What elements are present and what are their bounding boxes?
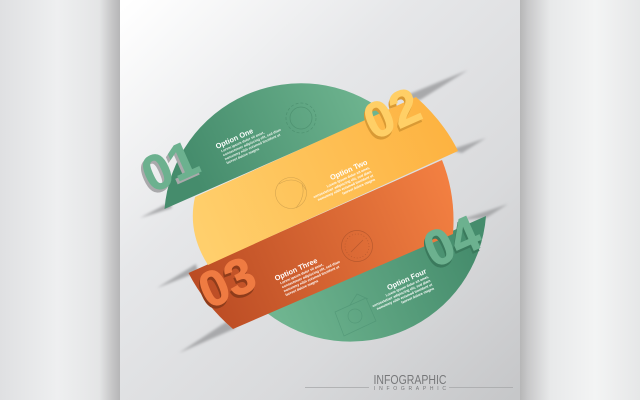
text: option two: Option Two bbox=[329, 157, 369, 182]
title: INFOGRAPHIC bbox=[374, 386, 446, 392]
icon: camera bbox=[335, 294, 376, 336]
title bbox=[374, 373, 446, 392]
text: option three: Lorem ipsum dolor sit amet, bbox=[280, 263, 324, 285]
text: option three: Option Three bbox=[273, 256, 319, 283]
text: option two: consectetuer adipiscing elit, sed diam bbox=[313, 170, 372, 199]
panel: option three orange band bbox=[188, 160, 454, 329]
slit shadows bbox=[140, 70, 508, 353]
text: option four: consectetuer adipiscing elit, sed diam bbox=[372, 279, 431, 308]
text: option three: laoreet dolore magna bbox=[285, 279, 319, 297]
number 02: 02 bbox=[355, 77, 429, 150]
panel: option four green segment bbox=[267, 216, 486, 342]
icon: gear bbox=[286, 103, 316, 133]
text: option three bbox=[273, 248, 344, 298]
text: option two bbox=[307, 157, 376, 207]
icon: gauge bbox=[342, 230, 372, 262]
icon: ball bbox=[276, 178, 306, 208]
number 03: 03 bbox=[189, 249, 263, 322]
text: option one: laoreet dolore magna bbox=[226, 147, 260, 165]
panel: option one green segment bbox=[164, 83, 385, 209]
text: option four bbox=[366, 266, 435, 316]
number 01: 01 bbox=[131, 133, 205, 206]
text: option one: nonummy nibh euismod tincidunt ut bbox=[224, 133, 282, 161]
text: option one: Option One bbox=[214, 126, 255, 151]
text: option four: Lorem ipsum dolor sit amet, bbox=[385, 275, 429, 298]
text: option four: nonummy nibh euismod tincidunt ut bbox=[376, 282, 434, 311]
text: option four: Option Four bbox=[386, 267, 428, 292]
text: option one bbox=[214, 116, 285, 166]
text: option one: consectetuer adipiscing elit, sed diam bbox=[222, 128, 282, 157]
text: option four: laoreet dolore magna bbox=[401, 287, 435, 305]
poster page bbox=[120, 0, 520, 400]
number 04: 04 bbox=[415, 205, 489, 278]
text: option three: consectetuer adipiscing elit, sed diam bbox=[281, 260, 341, 289]
text: option one: Lorem ipsum dolor sit amet, bbox=[221, 131, 265, 153]
text: option two: nonummy nibh euismod tincidunt ut bbox=[317, 173, 375, 202]
title: INFOGRAPHIC bbox=[374, 373, 446, 387]
title rules bbox=[305, 386, 513, 388]
number 02: 02 bbox=[354, 80, 428, 153]
number 01: 01 bbox=[133, 130, 207, 203]
number 04: 04 bbox=[414, 208, 488, 281]
panel: option two yellow band bbox=[193, 97, 458, 265]
text: option three: nonummy nibh euismod tincidunt ut bbox=[283, 265, 341, 293]
number 03: 03 bbox=[190, 246, 264, 319]
text: option two: Lorem ipsum dolor sit amet, bbox=[326, 166, 370, 189]
text: option two: laoreet dolore magna bbox=[342, 178, 376, 196]
